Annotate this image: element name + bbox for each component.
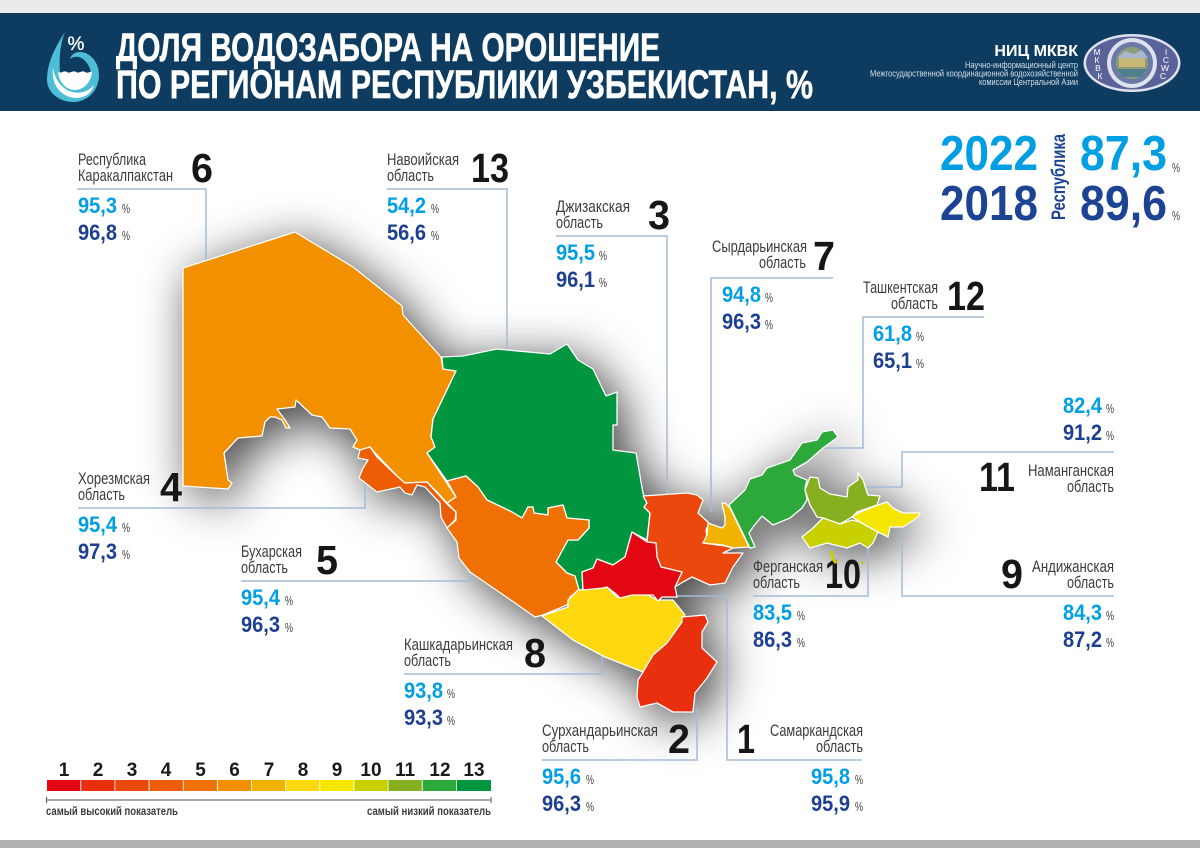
label: Andijan: 87,2 [1063, 627, 1102, 652]
logo: ICWC emblem: В [1095, 63, 1101, 73]
label: Bukhara: 95,4 [241, 585, 281, 610]
icon: water drop with percent: % [68, 34, 85, 55]
legend: colour scale: 3 [127, 760, 137, 781]
label: Syrdarya: Сырдарьинская [712, 237, 807, 256]
label: Surkhandarya: 96,3 [542, 791, 581, 816]
logo: ICWC emblem: C [1160, 71, 1166, 81]
region: Andijan [852, 502, 920, 537]
republic totals [940, 127, 1180, 231]
legend: colour scale: 11 [395, 760, 415, 781]
organisation name: Межгосударственной координационной водохозяйственной [870, 68, 1078, 80]
label: Namangan: Наманганская [1028, 461, 1114, 480]
republic totals: 2022 [940, 127, 1038, 181]
label: Surkhandarya: область [542, 737, 589, 756]
organisation name: Научно-информационный центр [965, 60, 1078, 71]
legend: colour scale: 5 [195, 760, 206, 781]
label: Andijan [1001, 551, 1114, 652]
label: Namangan: 82,4 [1063, 393, 1103, 418]
republic totals: 87,3 [1080, 127, 1167, 181]
region: Surkhandarya [637, 615, 717, 712]
label: Jizzakh: Джизакская [556, 197, 630, 216]
label: Karakalpakstan: Республика [78, 150, 146, 169]
region: Kashkadarya [542, 587, 685, 672]
label: Surkhandarya: 95,6 [542, 764, 581, 789]
logo: ICWC emblem: W [1161, 63, 1169, 73]
region: Fergana [802, 518, 878, 548]
label: Tashkent: 12 [947, 273, 985, 319]
label: Andijan: область [1067, 573, 1114, 592]
label: Kashkadarya: 8 [524, 630, 546, 676]
label: Syrdarya [712, 233, 835, 334]
label: Bukhara: % [285, 620, 293, 635]
label: Tashkent: 61,8 [873, 321, 912, 346]
label: Tashkent [863, 273, 985, 373]
label: Jizzakh: % [599, 248, 607, 263]
label: Karakalpakstan: 6 [191, 145, 213, 191]
label: Namangan: 11 [979, 454, 1015, 500]
label: Fergana [753, 551, 865, 652]
label: Khorezm: % [122, 547, 130, 562]
organisation name: комиссии Центральной Азии [979, 77, 1078, 88]
label: Andijan: 84,3 [1063, 600, 1102, 625]
label: Kashkadarya: 93,3 [404, 705, 443, 730]
legend: colour scale: 9 [332, 760, 342, 781]
label: Tashkent: 65,1 [873, 348, 912, 373]
label: Samarkand: % [855, 799, 863, 814]
republic totals: Республика [1049, 134, 1070, 220]
label: Andijan: % [1106, 608, 1114, 623]
label: Namangan [979, 393, 1114, 500]
region: Jizzakh [643, 493, 743, 587]
label: Fergana: % [797, 635, 805, 650]
label: Samarkand: 95,8 [811, 764, 850, 789]
label: Fergana: Ферганская [753, 557, 823, 576]
label: Fergana: 10 [825, 551, 861, 597]
logo: ICWC emblem: М [1093, 47, 1101, 57]
label: Navoi: область [387, 166, 434, 185]
label: Fergana: 83,5 [753, 600, 792, 625]
region: Bukhara [447, 476, 589, 617]
label: Surkhandarya: % [586, 799, 594, 814]
region: Khorezm [358, 447, 456, 528]
label: Samarkand: Самаркандская [770, 721, 863, 740]
label: Samarkand: % [855, 772, 863, 787]
label: Karakalpakstan: 95,3 [78, 193, 117, 218]
map shadow [183, 232, 920, 712]
label: Tashkent: % [916, 329, 924, 344]
legend: colour scale: 12 [429, 760, 451, 781]
label: Kashkadarya: % [447, 686, 455, 701]
label: Fergana: область [753, 573, 800, 592]
label: Surkhandarya: 2 [668, 716, 690, 762]
label: Navoi: % [431, 228, 439, 243]
label: Jizzakh [556, 192, 670, 292]
label: Navoi: 54,2 [387, 193, 426, 218]
legend: colour scale: 13 [463, 760, 485, 781]
label: Karakalpakstan: Каракалпакстан [78, 166, 173, 185]
legend: colour scale: 8 [298, 760, 308, 781]
label: Bukhara: Бухарская [241, 542, 302, 561]
logo: ICWC emblem: C [1163, 55, 1169, 65]
label: Khorezm: 97,3 [78, 539, 117, 564]
label: Navoi: Навоийская [387, 150, 459, 169]
label: Fergana: 86,3 [753, 627, 792, 652]
label: Fergana: % [797, 608, 805, 623]
label: Tashkent: Ташкентская [863, 278, 938, 297]
label: Syrdarya: % [765, 317, 773, 332]
label: Surkhandarya [542, 716, 690, 816]
region: Namangan [805, 473, 880, 524]
legend: colour scale: самый высокий показатель [46, 806, 178, 818]
label: Kashkadarya: % [447, 713, 455, 728]
organisation name [870, 43, 1078, 88]
label: Syrdarya: область [759, 253, 806, 272]
title: ДОЛЯ ВОДОЗАБОРА НА ОРОШЕНИЕ [116, 26, 660, 70]
label: Namangan: 91,2 [1063, 420, 1102, 445]
republic totals: % [1172, 160, 1180, 175]
label: Khorezm: % [122, 520, 130, 535]
republic totals: 2018 [940, 177, 1038, 231]
label: Karakalpakstan [78, 145, 213, 245]
logo: ICWC emblem [1084, 34, 1180, 92]
label: Navoi [387, 145, 509, 245]
logo: ICWC emblem: К [1098, 71, 1103, 81]
label: Khorezm: 4 [160, 464, 182, 510]
label: Surkhandarya: % [586, 772, 594, 787]
leader lines [77, 189, 1114, 760]
label: Samarkand [737, 716, 863, 816]
label: Namangan: область [1067, 477, 1114, 496]
label: Karakalpakstan: % [122, 201, 130, 216]
label: Andijan: Андижанская [1032, 557, 1114, 576]
label: Karakalpakstan: % [122, 228, 130, 243]
label: Samarkand: 1 [737, 716, 755, 762]
title: ПО РЕГИОНАМ РЕСПУБЛИКИ УЗБЕКИСТАН, % [116, 63, 813, 107]
label: Navoi: 13 [471, 145, 509, 191]
label: Tashkent: область [891, 294, 938, 313]
icon: water drop with percent [47, 32, 99, 102]
label: Jizzakh: 3 [648, 192, 670, 238]
label: Khorezm: 95,4 [78, 512, 118, 537]
label: Jizzakh: % [599, 275, 607, 290]
label: Jizzakh: область [556, 213, 603, 232]
republic totals: 89,6 [1080, 177, 1167, 231]
legend: colour scale: 2 [93, 760, 103, 781]
legend: colour scale [46, 760, 491, 818]
label: Bukhara: 96,3 [241, 612, 280, 637]
region: Tashkent [729, 430, 838, 548]
label: Jizzakh: 96,1 [556, 267, 595, 292]
label: Bukhara [241, 537, 338, 637]
region: Syrdarya [703, 503, 749, 548]
label: Samarkand: 95,9 [811, 791, 850, 816]
region: Republic of Karakalpakstan [183, 232, 456, 503]
label: Syrdarya: 96,3 [722, 309, 761, 334]
region: Samarkand [582, 532, 682, 601]
region: Navoi [427, 344, 650, 590]
label: Kashkadarya: область [404, 651, 451, 670]
header banner [0, 13, 1200, 111]
label: Andijan: % [1106, 635, 1114, 650]
label: Bukhara: область [241, 558, 288, 577]
label: Samarkand: область [816, 737, 863, 756]
legend: colour scale: 10 [360, 760, 382, 781]
label: Bukhara: 5 [316, 537, 338, 583]
label: Navoi: 56,6 [387, 220, 426, 245]
republic totals: % [1172, 208, 1180, 223]
logo: ICWC emblem: К [1095, 55, 1100, 65]
label: Khorezm [78, 464, 182, 564]
map of Uzbekistan regions [183, 232, 920, 712]
label: Karakalpakstan: 96,8 [78, 220, 117, 245]
label: Khorezm: Хорезмская [78, 469, 150, 488]
label: Kashkadarya [404, 630, 546, 730]
label: Surkhandarya: Сурхандарьинская [542, 721, 658, 740]
title [116, 26, 813, 107]
label: Syrdarya: 94,8 [722, 282, 761, 307]
legend: colour scale: самый низкий показатель [367, 806, 491, 818]
label: Syrdarya: 7 [813, 233, 835, 279]
label: Kashkadarya: Кашкадарьинская [404, 635, 513, 654]
label: Bukhara: % [285, 593, 293, 608]
label: Tashkent: % [916, 356, 924, 371]
legend: colour scale: 6 [229, 760, 240, 781]
label: Namangan: % [1106, 401, 1114, 416]
legend: colour scale: 4 [161, 760, 172, 781]
label: Khorezm: область [78, 485, 125, 504]
logo: ICWC emblem: I [1165, 47, 1167, 57]
label: Syrdarya: % [765, 290, 773, 305]
label: Namangan: % [1106, 428, 1114, 443]
label: Navoi: % [431, 201, 439, 216]
legend: colour scale: 7 [264, 760, 274, 781]
organisation name: НИЦ МКВК [994, 43, 1078, 60]
legend: colour scale: 1 [59, 760, 70, 781]
label: Andijan: 9 [1001, 551, 1023, 597]
label: Jizzakh: 95,5 [556, 240, 595, 265]
label: Kashkadarya: 93,8 [404, 678, 443, 703]
